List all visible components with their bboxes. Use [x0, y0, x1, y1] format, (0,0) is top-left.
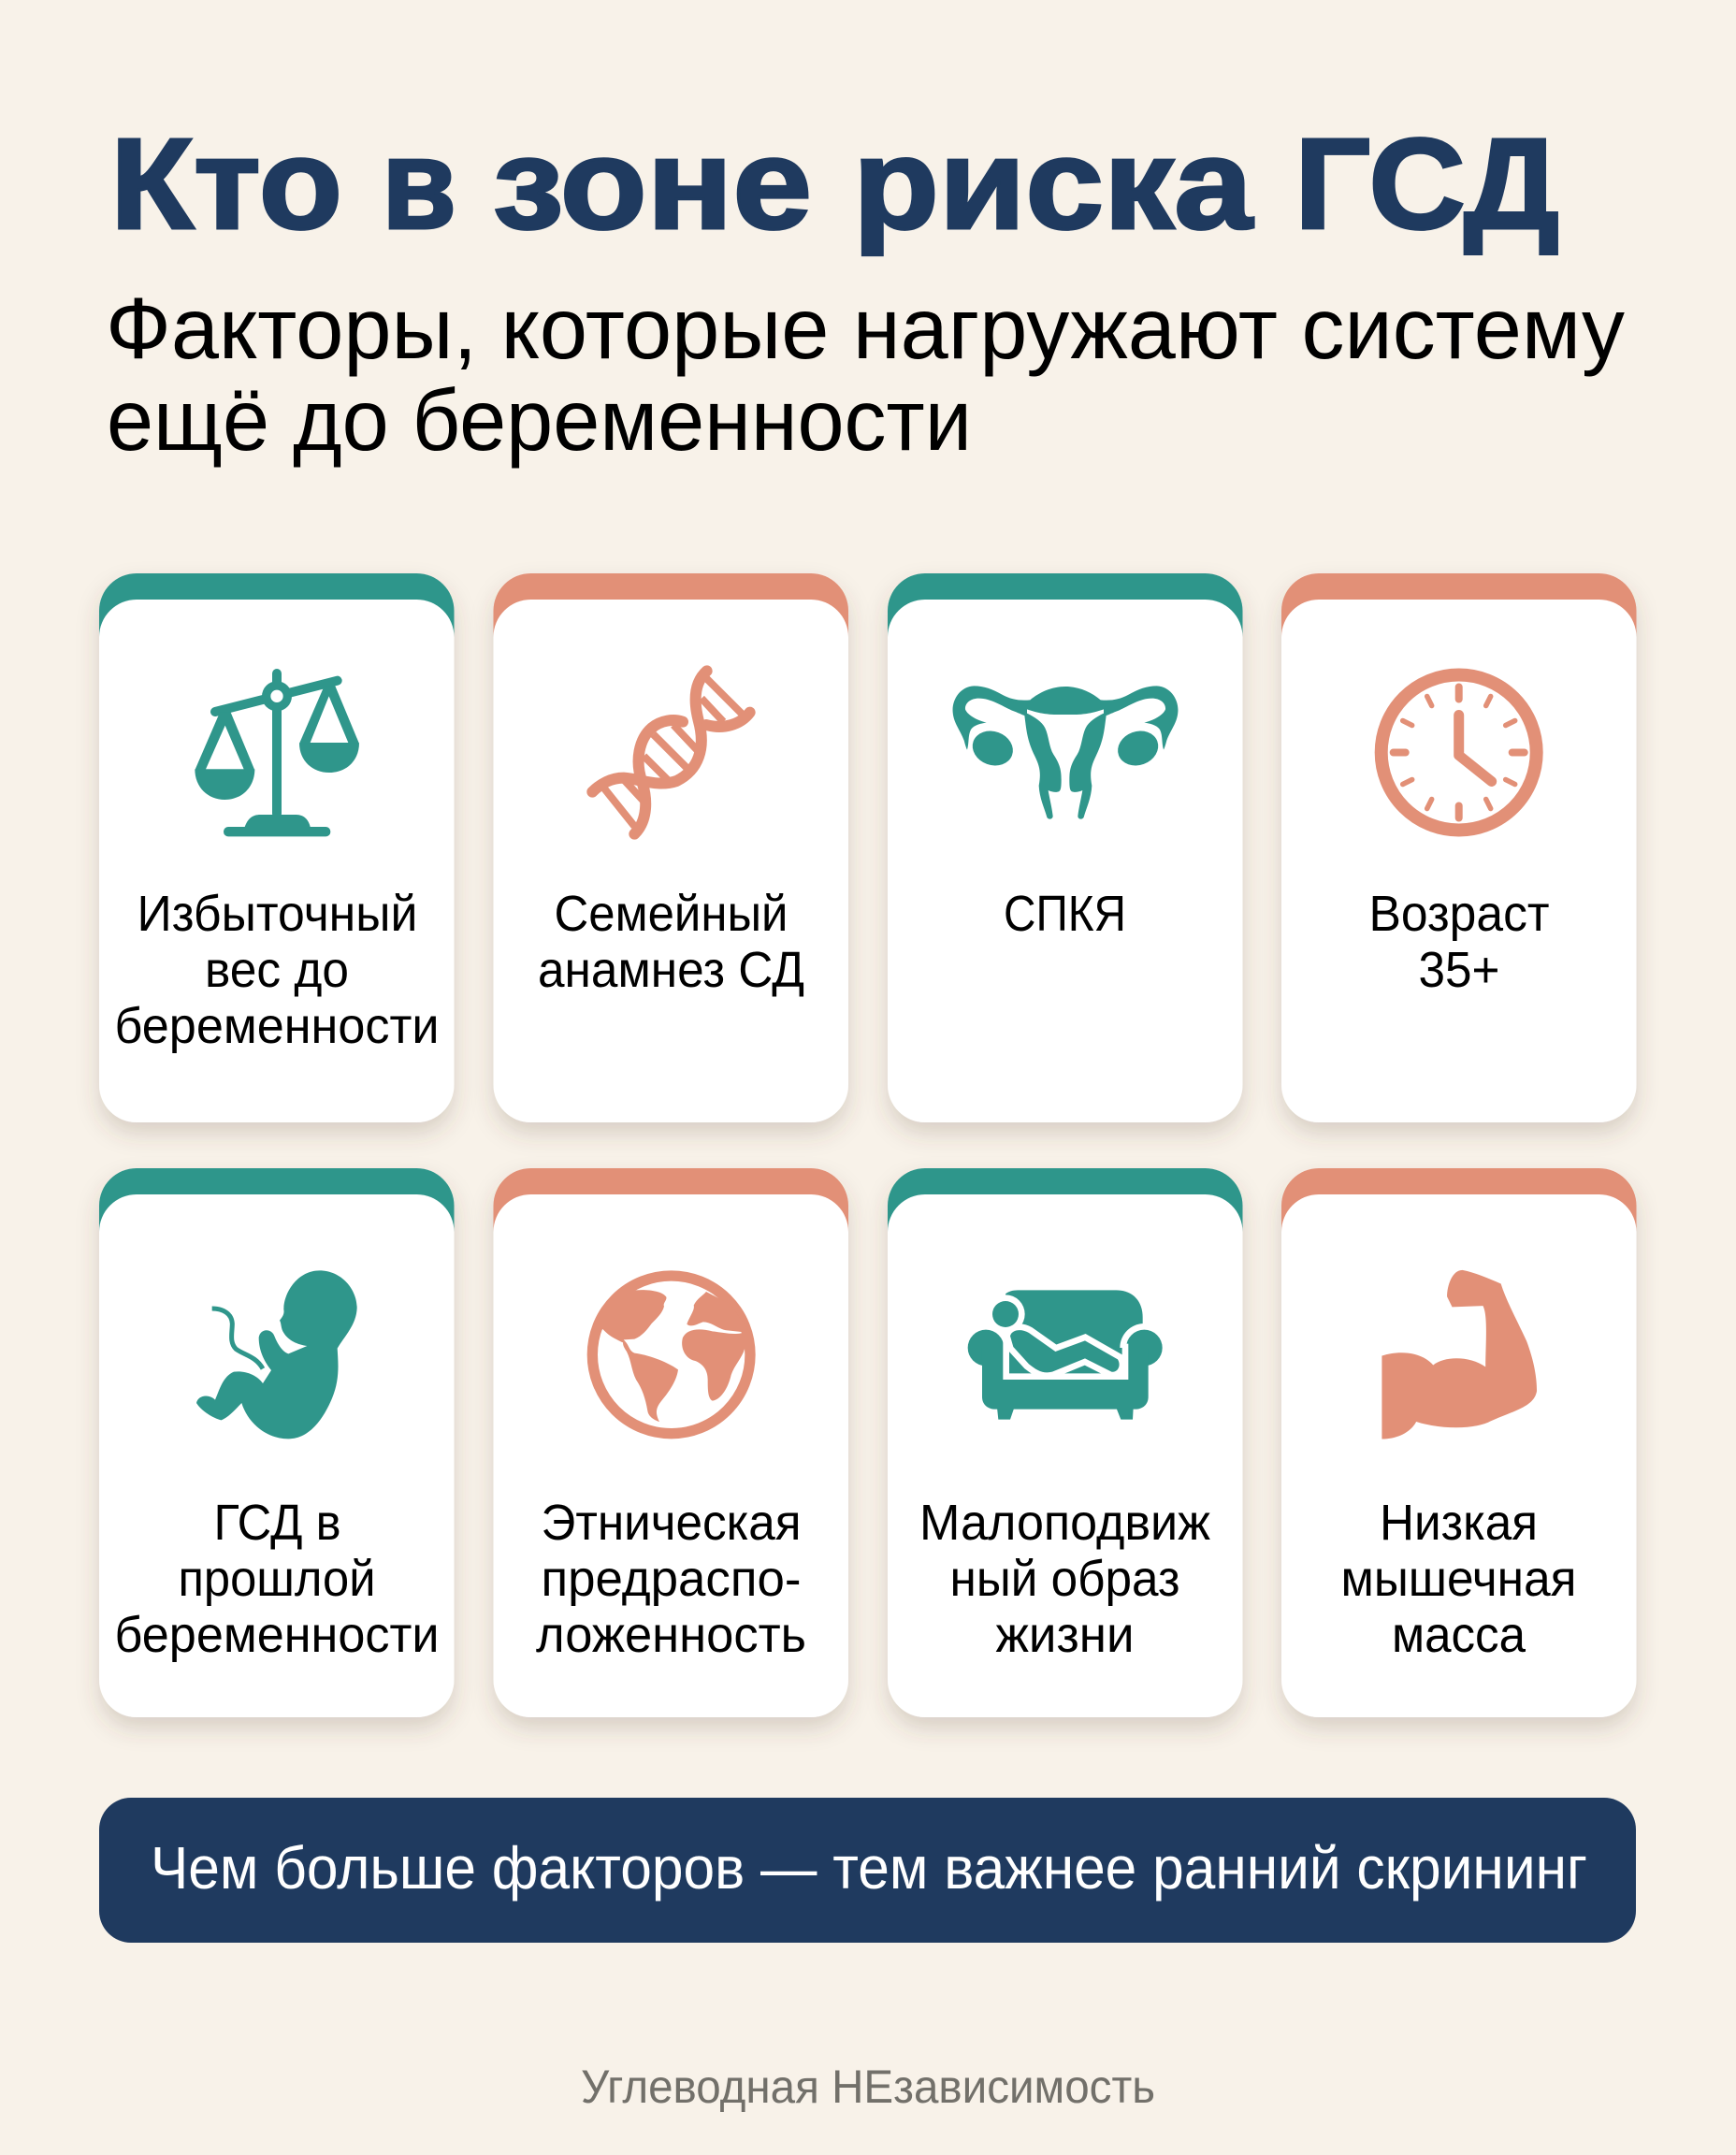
- label: sedentary: жизни: [995, 1607, 1134, 1663]
- label: low muscle mass: Низкая: [1380, 1495, 1538, 1551]
- panel: past GDM: [99, 1168, 455, 1717]
- label: past GDM: прошлой: [178, 1551, 376, 1607]
- panel: age: [1281, 573, 1637, 1122]
- panel: sedentary: [888, 1168, 1242, 1717]
- icon: fetus: [196, 1270, 357, 1439]
- title: риска: [853, 112, 1253, 256]
- label: past GDM: [114, 1495, 440, 1663]
- label: sedentary: [919, 1495, 1210, 1663]
- icon: globe: [592, 1276, 750, 1434]
- title: в: [382, 112, 456, 256]
- label: sedentary: ный образ: [950, 1551, 1180, 1607]
- title: Кто: [110, 112, 342, 256]
- label: past GDM: беременности: [114, 1607, 440, 1663]
- label: ethnicity: предраспо-: [541, 1551, 801, 1607]
- panel: overweight: [99, 573, 455, 1122]
- label: overweight: вес до: [205, 942, 349, 998]
- icon: dna: [592, 671, 750, 834]
- subtitle: ещё до беременности: [107, 371, 972, 469]
- label: ethnicity: [536, 1495, 806, 1663]
- label: overweight: беременности: [114, 998, 440, 1054]
- label: PCOS: СПКЯ: [1004, 886, 1126, 942]
- label: age: 35+: [1418, 942, 1500, 998]
- label: ethnicity: Этническая: [541, 1495, 801, 1551]
- subtitle: [106, 280, 1625, 469]
- label: past GDM: ГСД в: [213, 1495, 340, 1551]
- icon: uterus: [953, 686, 1178, 819]
- label: family history: анамнез СД: [538, 942, 804, 998]
- title: зоне: [493, 112, 812, 256]
- label: age: [1369, 886, 1549, 998]
- callout banner: [99, 1798, 1636, 1943]
- label: low muscle mass: масса: [1392, 1607, 1526, 1663]
- icon: scales: [195, 669, 359, 836]
- icon: clock: [1382, 675, 1537, 831]
- callout banner: Чем больше факторов — тем важнее ранний скрининг: [151, 1834, 1587, 1902]
- panel: low muscle mass: [1281, 1168, 1637, 1717]
- label: low muscle mass: мышечная: [1341, 1551, 1577, 1607]
- icon: sofa: [968, 1290, 1168, 1420]
- label: overweight: Избыточный: [137, 886, 417, 942]
- label: sedentary: Малоподвиж: [919, 1495, 1210, 1551]
- label: low muscle mass: [1341, 1495, 1577, 1663]
- label: overweight: [114, 886, 440, 1054]
- label: age: Возраст: [1369, 886, 1549, 942]
- title: [110, 112, 1559, 256]
- label: family history: [538, 886, 804, 998]
- subtitle: Факторы, которые нагружают систему: [106, 280, 1625, 377]
- footer credit: Углеводная НЕзависимость: [581, 2061, 1155, 2113]
- icon: flexed arm: [1382, 1270, 1537, 1439]
- label: family history: Семейный: [554, 886, 788, 942]
- label: ethnicity: ложенность: [536, 1607, 806, 1663]
- panel: ethnicity: [494, 1168, 848, 1717]
- title: ГСД: [1295, 112, 1559, 256]
- panel: PCOS: [888, 573, 1242, 1122]
- panel: family history: [494, 573, 848, 1122]
